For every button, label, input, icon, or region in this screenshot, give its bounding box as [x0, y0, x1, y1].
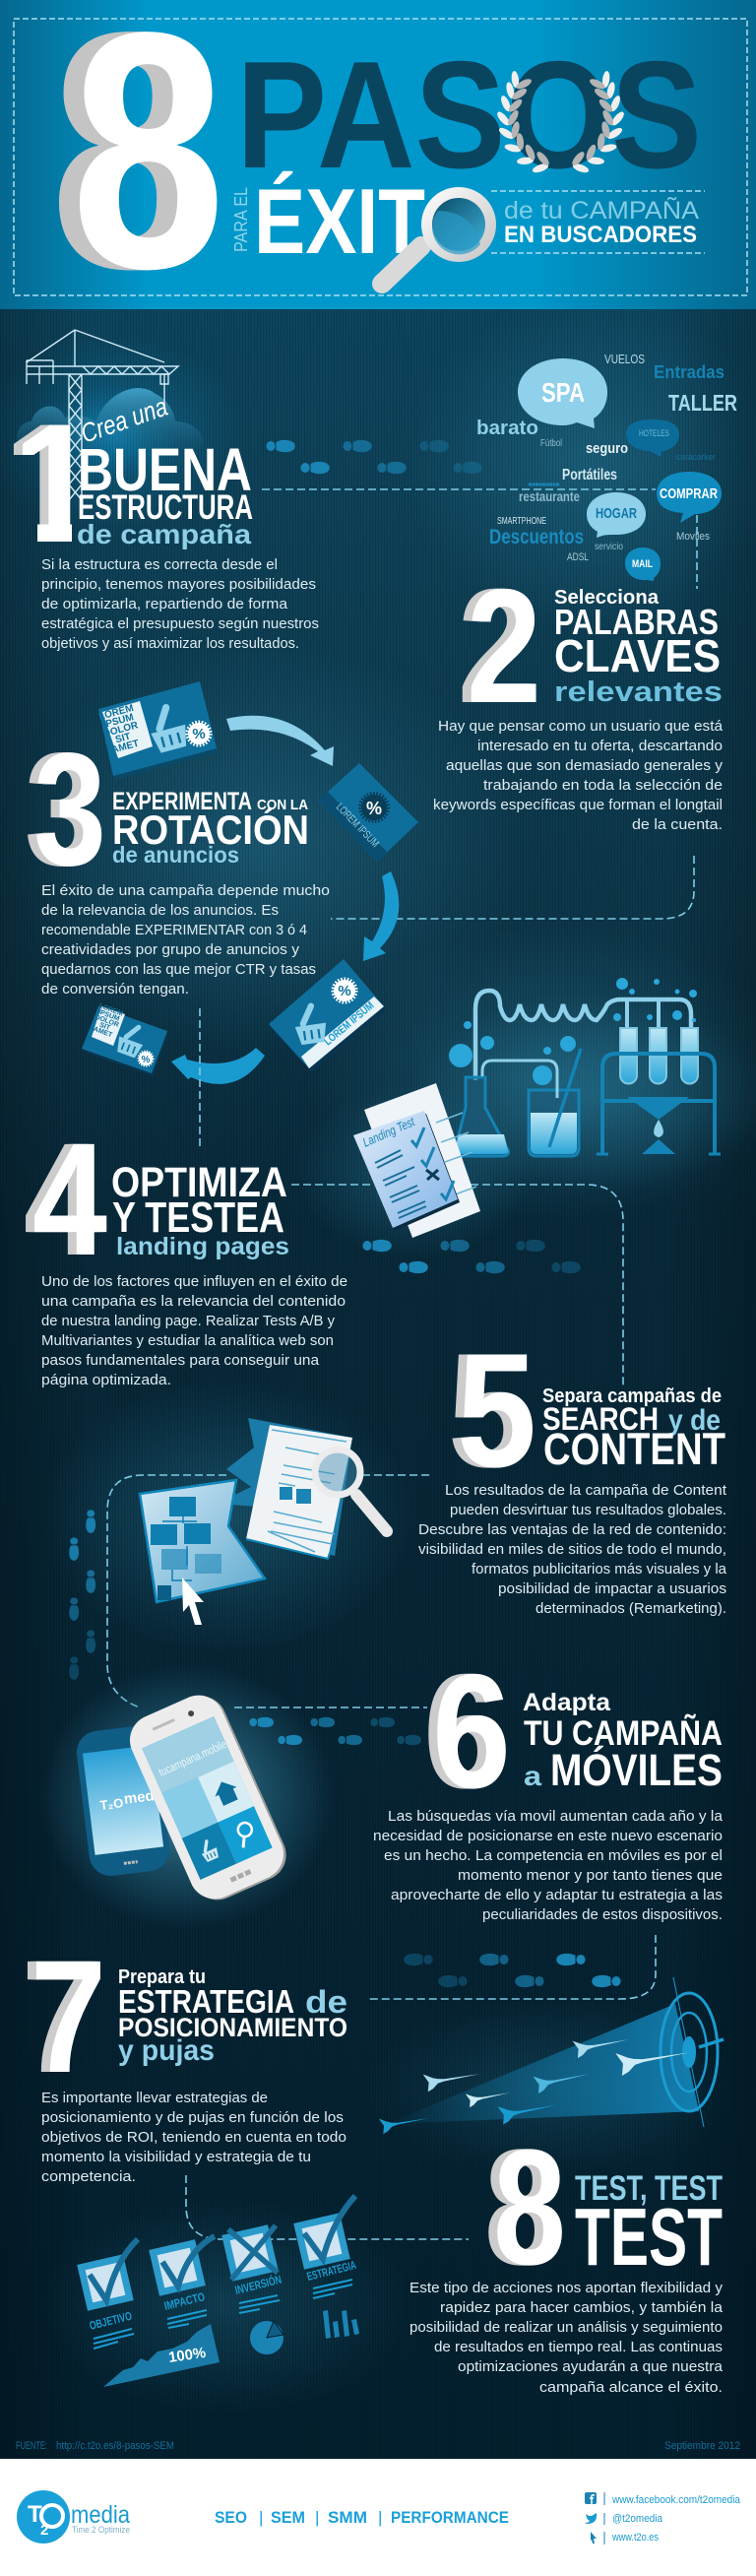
heading: Separa campañas de [542, 1385, 722, 1407]
bubble COMPRAR: COMPRAR [660, 486, 718, 502]
text block: página optimizada. [41, 1372, 171, 1388]
arrow 2 [363, 871, 399, 961]
bar chart [323, 2310, 359, 2339]
heading: POSICIONAMIENTO [118, 2013, 347, 2042]
checkbox INVERSIÓN [221, 2224, 283, 2313]
text block: visibilidad en miles de sitios de todo el mundo, [418, 1541, 726, 1558]
ad card A: IPSUM [102, 712, 135, 731]
ad card D: AMET [93, 1026, 114, 1039]
title word EXITO: ÉXIT [254, 169, 425, 273]
heading: CONTENT [543, 1424, 725, 1474]
label 100%: 100% [167, 2345, 207, 2366]
checkbox OBJETIVO [77, 2239, 138, 2349]
footprints 6 [249, 1717, 421, 1745]
back phone [74, 1723, 176, 1878]
ad card B: % [366, 799, 382, 818]
text block: recomendable EXPERIMENTAR con 3 ó 4 [41, 922, 307, 938]
logo: media [71, 2501, 130, 2529]
heading de campaña: de campaña [77, 519, 251, 549]
arrow 3 [171, 1048, 265, 1084]
checkbox ESTRATEGIA: ESTRATEGIA [305, 2258, 357, 2284]
text block: objetivos y así maximizar los resultados. [41, 635, 299, 652]
sitemap sheet [140, 1480, 265, 1602]
text block: principio, tenemos mayores posibilidades [41, 576, 316, 593]
back phone: media [123, 1786, 168, 1808]
footprints 4 [362, 1240, 581, 1273]
text block [41, 2090, 346, 2185]
ad card C [269, 959, 386, 1072]
source line: FUENTE: [16, 2440, 47, 2452]
text block: de conversión tengan. [41, 981, 189, 998]
ad card D: DOLOR [94, 1014, 120, 1029]
text block: aprovecharte de ello y adaptar tu estrategia a las [391, 1887, 723, 1903]
coil [475, 991, 691, 1080]
subtitle: EN BUSCADORES [504, 222, 697, 248]
heading: a [524, 1761, 541, 1791]
pie chart [250, 2321, 284, 2354]
source line: http://c.t2o.es/8-pasos-SEM [56, 2440, 174, 2452]
heading: Selecciona [554, 587, 660, 609]
ad card A: LOREM [97, 703, 135, 723]
text block: Uno de los factores que influyen en el éxito de [41, 1273, 347, 1290]
number 3: 3 [33, 719, 106, 899]
heading: y de [668, 1404, 721, 1437]
content sheet [246, 1425, 352, 1559]
keyword cloud: ADSL [567, 551, 589, 563]
text block: aquellas que son demasiado generales y [446, 757, 723, 774]
ad card B [318, 763, 418, 862]
text block: posibilidad de realizar un análisis y seguimiento [410, 2319, 723, 2336]
checkbox ESTRATEGIA [293, 2196, 357, 2298]
heading [111, 1159, 289, 1260]
text block: pasos fundamentales para conseguir una [41, 1352, 320, 1369]
heading BUENA: BUENA [78, 436, 252, 503]
icon: laboratory [413, 978, 756, 1191]
footer panel [0, 2459, 756, 2576]
bubble COMPRAR [657, 472, 722, 523]
text block: quedarnos con las que mejor CTR y tasas [41, 961, 316, 978]
heading: landing pages [116, 1233, 289, 1260]
heading: CON LA [257, 797, 308, 813]
front phone: tucampana.mobile [157, 1737, 229, 1779]
ad card D: SIT [98, 1022, 111, 1032]
icon: cursor [591, 2532, 597, 2544]
services: SEM [271, 2508, 305, 2527]
text block: Es importante llevar estrategias de [41, 2090, 268, 2106]
footprints vertical [69, 1510, 95, 1680]
text block: creatividades por grupo de anuncios y [41, 941, 300, 958]
keyword cloud [476, 352, 737, 581]
icon: crane and clouds [17, 330, 203, 512]
ad card A: % [192, 726, 206, 742]
heading ESTRUCTURA: ESTRUCTURA [78, 488, 253, 527]
text block: Si la estructura es correcta desde el [41, 556, 278, 573]
footprints 7 [404, 1954, 621, 1987]
keyword cloud: Portátiles [562, 467, 617, 483]
ad card A: DOLOR [102, 720, 140, 740]
heading: y pujas [118, 2034, 215, 2067]
text block: una campaña es la relevancia del contenido [41, 1293, 346, 1310]
number 7: 7 [31, 1926, 106, 2106]
social links [585, 2492, 741, 2544]
ad card C: LOREM IPSUM [322, 999, 376, 1048]
text block: pueden desvirtuar tus resultados globales. [450, 1502, 726, 1518]
keyword cloud: barato [476, 418, 538, 439]
icon: landing test pages: Landing Test [360, 1114, 417, 1150]
checkbox IMPACTO: IMPACTO [162, 2289, 206, 2313]
text block: Este tipo de acciones nos aportan flexibilidad y [410, 2280, 724, 2296]
step 3 panel [33, 681, 418, 1149]
keyword cloud: TALLER [668, 390, 737, 416]
text block [41, 1273, 347, 1388]
text block: trabajando en toda la selección de [483, 777, 723, 794]
social links: www.facebook.com/t2omedia [611, 2494, 741, 2506]
number 2: 2 [467, 555, 541, 737]
text block: campaña alcance el éxito. [539, 2379, 723, 2396]
services: PERFORMANCE [391, 2508, 509, 2527]
keyword cloud: restaurante [519, 488, 580, 504]
ad card D: IPSUM [97, 1009, 120, 1023]
heading: ESTRATEGIA [118, 1983, 294, 2020]
number 8: 8 [493, 2116, 566, 2299]
ad card C: % [338, 983, 351, 999]
text block: peculiaridades de estos dispositivos. [482, 1906, 723, 1923]
rack and burner [602, 1054, 715, 1154]
heading [523, 1689, 723, 1795]
title word PASOS: PASOS [236, 30, 702, 200]
heading: TU CAMPAÑA [524, 1714, 723, 1753]
text block: de la cuenta. [632, 816, 723, 833]
text block: Descubre las ventajas de la red de contenido: [418, 1521, 726, 1538]
step 8 panel [186, 2116, 724, 2396]
step 4 panel [32, 1109, 623, 1388]
heading: PALABRAS [554, 602, 719, 642]
front phone [122, 1686, 294, 1909]
keyword cloud: Fútbol [540, 438, 562, 449]
text block [433, 718, 724, 833]
text block: optimizaciones ayudarán a que nuestra [458, 2358, 724, 2375]
checkbox OBJETIVO: OBJETIVO [88, 2309, 133, 2333]
laurel wreath [495, 68, 626, 178]
step 5 panel [107, 1320, 727, 1707]
services: | [378, 2508, 382, 2527]
text block: El éxito de una campaña depende mucho [41, 882, 330, 899]
keyword cloud: caracarker [676, 452, 716, 463]
heading: CLAVES [554, 630, 721, 681]
services: SEO [215, 2508, 247, 2527]
icon: twitter [585, 2513, 597, 2524]
bubble HOGAR [587, 492, 646, 538]
step 1 panel [12, 330, 319, 652]
subtitle: de tu CAMPAÑA [504, 196, 699, 225]
keyword cloud: SMARTPHONE [497, 516, 546, 527]
heading: de [305, 1984, 347, 2020]
icon: mobile phones [39, 1664, 335, 1930]
services [215, 2508, 509, 2527]
vertical PARA EL: PARA EL [231, 187, 251, 252]
ad card B: LOREM IPSUM [334, 802, 381, 850]
bubble HOGAR: HOGAR [596, 505, 637, 522]
cursor [182, 1578, 204, 1625]
text block: Hay que pensar como un usuario que está [438, 718, 724, 735]
text block [41, 556, 319, 652]
heading: Y TESTEA [112, 1193, 284, 1242]
flask [455, 1077, 508, 1156]
heading: SEARCH [542, 1401, 659, 1437]
text block: competencia. [41, 2168, 136, 2185]
magnifier [315, 1449, 387, 1531]
number 6: 6 [432, 1641, 511, 1822]
checkbox INVERSIÓN: INVERSIÓN [233, 2272, 283, 2297]
bubble MAIL [625, 547, 661, 581]
footprints 1 [266, 440, 482, 474]
bubble SPA [518, 358, 607, 428]
text block: formatos publicitarios más visuales y la [472, 1561, 727, 1578]
icon: facebook [585, 2492, 597, 2504]
step 7 panel [31, 1926, 347, 2185]
icon: magnifying glass [382, 187, 496, 284]
text block: determinados (Remarketing). [536, 1600, 726, 1617]
logo: Time 2 Optimize [72, 2525, 130, 2535]
bubble HOTELES: HOTELES [639, 428, 669, 439]
text block: estratégica el presupuesto según nuestros [41, 615, 319, 632]
logo: T [28, 2501, 42, 2528]
text block: de la relevancia de los anuncios. Es [41, 902, 279, 919]
social links: www.t2o.es [611, 2532, 659, 2544]
heading: Prepara tu [118, 1966, 206, 1988]
text block: es un hecho. La competencia en móviles es por el [384, 1847, 723, 1864]
bubble MAIL: MAIL [632, 558, 653, 570]
heading [575, 2169, 723, 2283]
text block [410, 2280, 724, 2396]
bubbles [449, 978, 697, 1085]
beaker [529, 1090, 579, 1156]
ad card D: % [142, 1055, 151, 1065]
number 4: 4 [32, 1109, 107, 1289]
step 2 panel [331, 555, 724, 919]
arrow 1 [226, 716, 334, 766]
Crea una: Crea una [77, 392, 171, 449]
heading [554, 587, 723, 708]
bubble SPA: SPA [541, 377, 585, 408]
heading [118, 1966, 347, 2067]
text block: rapidez para hacer cambios, y también la [440, 2299, 724, 2316]
heading: relevantes [554, 676, 723, 708]
icon: content pages and magnifier [140, 1418, 387, 1625]
darts [379, 2031, 691, 2134]
keyword cloud: Descuentos [489, 526, 584, 548]
keyword cloud: Moviles [676, 531, 710, 543]
text block [418, 1482, 727, 1617]
logo: 2 [40, 2522, 48, 2539]
text block [41, 882, 330, 998]
ad card A: AMET [110, 739, 140, 756]
header panel [0, 0, 756, 339]
keyword cloud: servicio [595, 542, 623, 552]
text block: momento menor y por tanto tienes que [458, 1867, 723, 1884]
services: | [259, 2508, 263, 2527]
heading: de anuncios [112, 842, 239, 868]
icon: target and darts [379, 1977, 724, 2134]
heading [542, 1385, 725, 1474]
step 6 panel [369, 1641, 724, 1999]
text block: de nuestra landing page. Realizar Tests A/B y [41, 1313, 335, 1329]
text block: Multivariantes y estudiar la analítica web son [41, 1332, 334, 1349]
text block: de optimizarla, repartiendo de forma [41, 596, 288, 612]
text block: necesidad de posicionarse en este nuevo escenario [373, 1828, 723, 1844]
number 5: 5 [457, 1320, 536, 1501]
heading: ROTACIÓN [112, 805, 309, 853]
text block: Los resultados de la campaña de Content [445, 1482, 727, 1499]
text block: keywords específicas que forman el longtail [433, 797, 723, 813]
heading: EXPERIMENTA [112, 788, 252, 815]
heading [112, 788, 309, 868]
text block [373, 1808, 724, 1923]
text block: posibilidad de impactar a usuarios [498, 1580, 726, 1597]
keyword cloud: Entradas [654, 362, 724, 382]
keyword cloud: seguro [586, 440, 628, 457]
ad card D: LOREM [97, 1002, 124, 1018]
logo [17, 2490, 130, 2544]
source line [16, 2440, 740, 2452]
ad card D [82, 1002, 168, 1076]
social links: @t2omedia [612, 2513, 663, 2525]
test tubes [620, 1028, 698, 1084]
text block: posicionamiento y de pujas en función de los [41, 2109, 344, 2126]
services: | [315, 2508, 319, 2527]
ad card A: SIT [114, 732, 132, 745]
bubble HOTELES [626, 419, 679, 457]
text block: de resultados en tiempo real. Las continuas [434, 2339, 723, 2355]
heading: MÓVILES [550, 1745, 723, 1795]
heading: Adapta [523, 1689, 611, 1716]
ad card A [97, 681, 218, 780]
checkbox IMPACTO [149, 2236, 215, 2328]
back phone: T₂O [99, 1795, 124, 1813]
keyword cloud: VUELOS [604, 352, 645, 366]
services: SMM [328, 2508, 367, 2527]
source line: Septiembre 2012 [664, 2440, 740, 2452]
icon: landing test pages [353, 1083, 480, 1238]
text block: Las búsquedas vía movil aumentan cada año y la [388, 1808, 724, 1825]
area chart [103, 2324, 220, 2387]
number 1: 1 [12, 389, 99, 578]
text block: objetivos de ROI, teniendo en cuenta en todo [41, 2129, 346, 2146]
subtitle [491, 191, 705, 253]
text block: momento la visibilidad y estrategia de tu [41, 2149, 311, 2165]
heading: OPTIMIZA [111, 1159, 287, 1206]
text block: interesado en tu oferta, descartando [477, 738, 723, 754]
icon: checklist [77, 2196, 359, 2387]
